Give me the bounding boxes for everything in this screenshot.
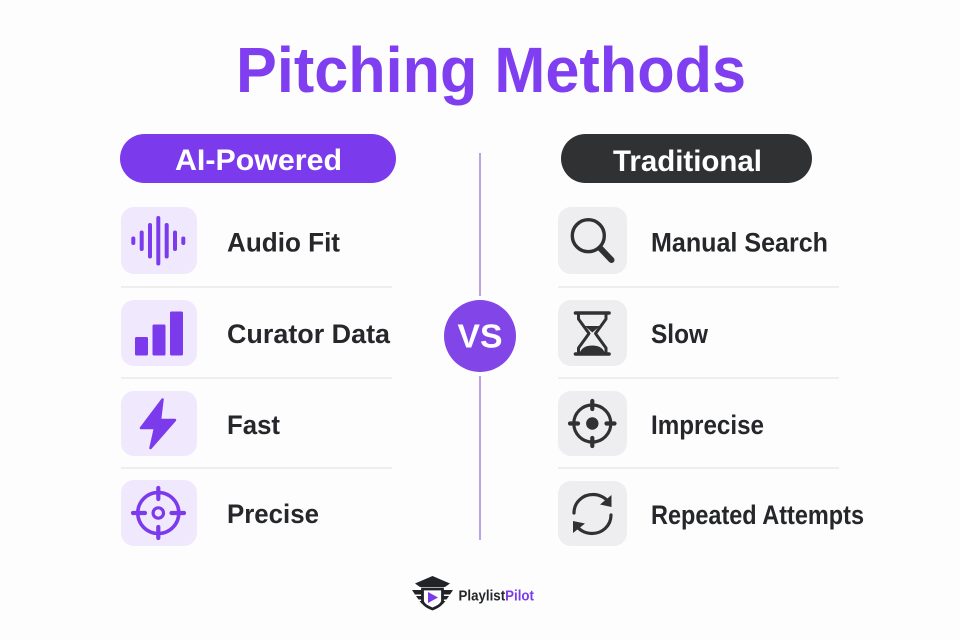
row: Precise bbox=[121, 480, 319, 546]
label: Fast: Fast bbox=[227, 410, 280, 440]
label: Precise: Precise bbox=[227, 499, 319, 529]
label: Repeated Attempts: Repeated Attempts bbox=[651, 500, 864, 530]
label: Audio Fit: Audio Fit bbox=[227, 228, 340, 258]
label: Imprecise: Imprecise bbox=[651, 410, 764, 440]
VS badge: VS bbox=[458, 318, 502, 354]
VS badge bbox=[444, 300, 516, 372]
logo: PlaylistPilot bbox=[412, 576, 534, 609]
panel: Traditional bbox=[558, 134, 864, 546]
icon: audio waveform bbox=[121, 207, 197, 274]
heading pill: Traditional: Traditional bbox=[613, 145, 762, 178]
row: Audio Fit bbox=[121, 207, 340, 274]
icon: hourglass bbox=[558, 300, 627, 366]
label: Manual Search: Manual Search bbox=[651, 228, 828, 258]
wordmark: PlaylistPilot bbox=[458, 588, 534, 604]
row: Slow bbox=[558, 300, 709, 366]
icon: target bbox=[121, 480, 197, 546]
heading pill: AI-Powered: AI-Powered bbox=[175, 144, 342, 177]
title: Pitching Methods bbox=[236, 34, 746, 106]
label: Curator Data: Curator Data bbox=[227, 319, 391, 349]
icon: bar chart bbox=[121, 300, 197, 366]
panel: AI-Powered bbox=[120, 134, 396, 546]
row: Fast bbox=[121, 391, 280, 456]
heading pill: AI-Powered bbox=[120, 134, 396, 183]
row: Curator Data bbox=[121, 300, 391, 366]
icon: lightning bolt bbox=[121, 391, 197, 456]
icon: shield logo with cap and wings bbox=[412, 576, 453, 609]
icon: magnifying glass bbox=[558, 207, 627, 274]
heading pill: Traditional bbox=[561, 134, 812, 183]
icon: refresh arrows bbox=[558, 481, 627, 546]
row: Manual Search bbox=[558, 207, 828, 274]
center divider bbox=[479, 153, 481, 540]
label: Slow: Slow bbox=[651, 319, 709, 349]
icon: crosshair bbox=[558, 391, 627, 456]
row: Imprecise bbox=[558, 391, 764, 456]
row: Repeated Attempts bbox=[558, 481, 864, 546]
